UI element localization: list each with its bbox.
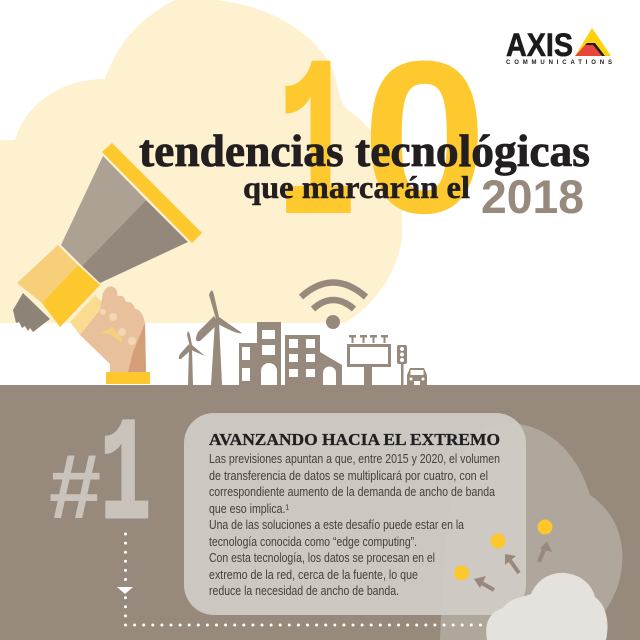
- number #1: 1: [100, 395, 151, 561]
- body text: [209, 452, 500, 598]
- logo: Axis Communications: [506, 27, 612, 66]
- body text: reduce la necesidad de ancho de banda.: [209, 584, 399, 598]
- panel: text card: [184, 413, 526, 615]
- heading: AVANZANDO HACIA EL EXTREMO: [209, 430, 500, 449]
- icon: hand holding megaphone: [80, 286, 150, 384]
- big number 10: 0: [362, 16, 487, 258]
- icon: car: [407, 368, 427, 385]
- title: tendencias tecnológicas: [139, 126, 590, 176]
- icon: traffic light: [397, 345, 407, 385]
- icon: yellow data points: [454, 520, 552, 580]
- arrows toward data points: [474, 541, 552, 590]
- background cloud behind panel: [440, 423, 622, 640]
- body text: Una de las soluciones a este desafío puede estar en la: [209, 518, 464, 532]
- icon: city buildings: [239, 322, 342, 385]
- icon: wifi signal: [301, 282, 366, 329]
- body text: correspondiente aumento de la demanda de ancho de banda: [209, 485, 495, 499]
- number #1: [49, 395, 151, 561]
- background cloud: [0, 0, 402, 323]
- number #1: #: [49, 436, 101, 538]
- logo: Axis Communications: COMMUNICATIONS: [506, 60, 612, 66]
- big number 10: [278, 16, 487, 279]
- logo: Axis Communications: AXIS: [506, 27, 573, 63]
- front cloud: [486, 573, 608, 640]
- icon: billboard: [348, 335, 390, 385]
- icon: megaphone: [13, 143, 202, 335]
- big number 10: 1: [278, 24, 355, 279]
- icon: wind turbines: [179, 290, 242, 385]
- body text: Las previsiones apuntan a que, entre 2015 y 2020, el volumen: [209, 452, 500, 466]
- title: que marcarán el: [243, 169, 470, 205]
- body text: tecnología conocida como “edge computing”.: [209, 535, 417, 549]
- body text: Con esta tecnología, los datos se procesan en el: [209, 551, 435, 565]
- dotted connector with arrow: [117, 534, 490, 625]
- title: [139, 126, 590, 223]
- body text: extremo de la red, cerca de la fuente, lo que: [209, 568, 418, 582]
- title: 2018: [481, 170, 584, 223]
- section background: [0, 385, 640, 640]
- body text: que eso implica.¹: [209, 502, 289, 516]
- body text: de transferencia de datos se multiplicará por cuatro, con el: [209, 469, 488, 483]
